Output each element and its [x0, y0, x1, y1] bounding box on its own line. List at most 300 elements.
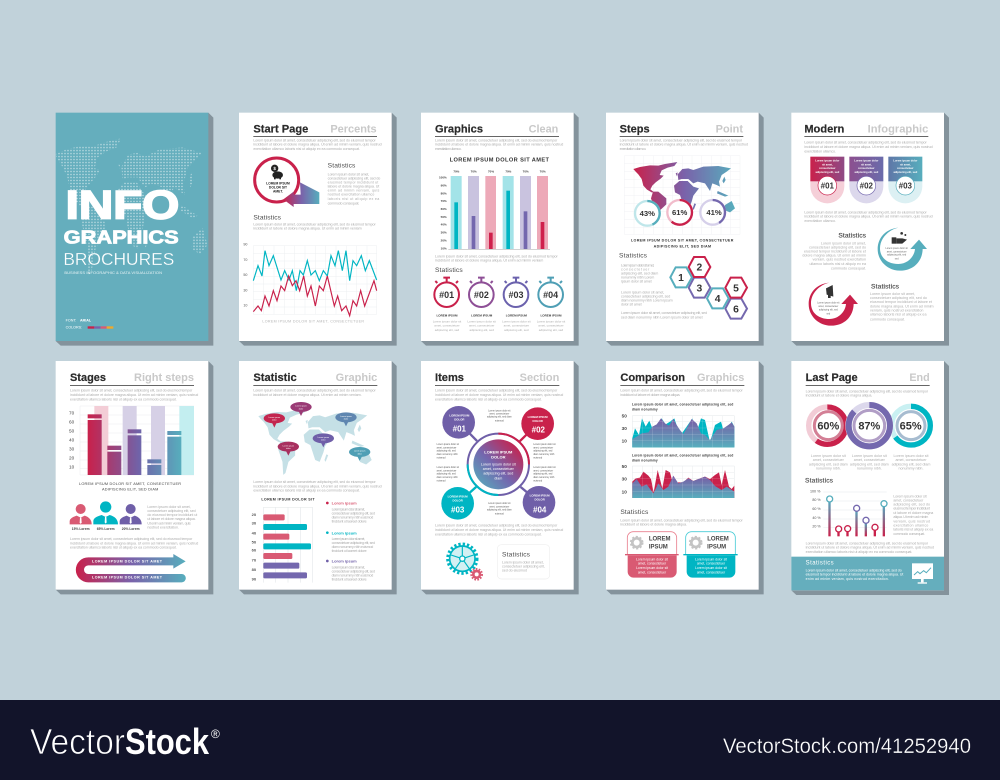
donut 60%: 60%: [817, 421, 840, 433]
donut captions: adipiscing elit, sed diam: [809, 462, 848, 466]
area chart 1: 10: [622, 439, 627, 444]
item captions: Lorem ipsum dolor sit: [533, 466, 556, 469]
card: crimson: IPSUM: [649, 544, 668, 550]
numbered hexagons: 6: [733, 304, 739, 315]
lower text: incididunt ut labore et dolore magna aliqua. Ut enim ad minim veniam, quis nostrud: [435, 528, 563, 532]
area chart 1: 50: [622, 414, 627, 419]
lollipop chart: 20 %: [812, 525, 821, 529]
statistics text: Lorem ipsum dolor sit amet, consectetuer adipiscing elit, sed do eiusmod tempor: [620, 518, 743, 522]
intro text: incididunt ut labore et dolore magna aliqua. Ut enim ad minim veniam, quis nostrud: [435, 143, 563, 147]
badge 02: Lorem ipsum dolor: [854, 159, 878, 163]
lower text: exercitation ullamco laboris nisi ut aliquip ex ea commodo consequat.: [70, 546, 177, 550]
area chart 2: 10: [622, 489, 627, 494]
people text: do eiusmod tempor incididunt ut: [147, 513, 197, 517]
panel: Items: [421, 361, 579, 594]
item captions: adipiscing elit, sed: [533, 473, 553, 476]
heading: [435, 123, 559, 137]
item 02: #02: [532, 426, 546, 435]
item captions: euismod: [437, 457, 446, 459]
people percentages: 65% Lorem: [97, 527, 115, 531]
item captions: adipiscing elit, sed: [533, 450, 553, 453]
intro text: [806, 389, 929, 398]
area chart 2: diam nonummy: [632, 458, 658, 462]
donut 65%: 65%: [900, 421, 922, 433]
middle text: exercitation ullamco.: [804, 219, 836, 223]
heading: Items: [435, 372, 464, 384]
intro text: Lorem ipsum dolor sit amet, consectetuer adipiscing elit, sed do eiusmod tempor: [253, 389, 376, 393]
crimson circular arrow: adipiscing elit, sed: [819, 308, 839, 311]
statistics text: [620, 509, 743, 527]
map caption: LOREM IPSUM DOLOR SIT AMET, CONSECTETUER: [631, 239, 734, 243]
donut captions: adipiscing elit, sed diam: [892, 462, 930, 466]
stopwatch captions: amet, consectetuer: [434, 324, 460, 328]
item 03: [441, 487, 474, 520]
lollipop chart: 80 %: [812, 498, 821, 502]
intro text: [620, 389, 743, 397]
line chart: 50: [243, 273, 247, 277]
area chart 1: [622, 403, 734, 447]
icon: hand with coins: [892, 232, 907, 244]
map text: [253, 480, 382, 493]
item captions: amet, consectetuer: [533, 469, 553, 472]
crimson circular arrow: [809, 283, 858, 326]
bar chart: 70%: [441, 199, 447, 203]
card: crimson: Lorem ipsum dolor sit: [636, 566, 668, 570]
lollipop chart: 40 %: [812, 516, 821, 520]
stopwatch 04: [538, 278, 563, 307]
world map with bubbles: Lorem ipsum: [283, 444, 294, 447]
chart title: LOREM IPSUM DOLOR SIT AMET: [450, 158, 550, 164]
donut captions: amet, consectetuer: [854, 458, 886, 462]
statistics left-aligned text: dolore magna aliqua. Ut enim ad minim: [870, 304, 934, 308]
people text: [147, 505, 197, 530]
brand logo text: Stock: [125, 721, 210, 762]
card: crimson: amet, consectetuer: [638, 571, 667, 575]
bar chart: 40: [69, 438, 75, 443]
world map with bubbles: dolor: [272, 419, 277, 422]
intro text: incididunt ut labore et dolore magna aliqua. Ut enim ad minim veniam, quis nostrud: [804, 145, 933, 149]
bar chart: 10%: [441, 246, 447, 250]
statistics text: adipiscing elit, sed diam: [621, 271, 658, 275]
panel: brochure cover: [55, 113, 213, 346]
heading: Percents: [330, 123, 377, 135]
people text: nostrud exercitation.: [147, 526, 179, 530]
legend: tincidunt ut laoreet dolore: [332, 520, 367, 524]
statistics right-aligned text: Lorem ipsum dolor sit amet,: [821, 241, 866, 245]
intro text: [620, 139, 748, 151]
badge 03: adipiscing elit, sed: [893, 170, 918, 174]
icon: gear: [690, 537, 701, 548]
legend: Lorem ipsum dolor sit amet,: [332, 508, 365, 512]
statistics left-aligned text: eiusmod tempor incididunt ut labore et: [870, 300, 932, 304]
legend: consectetuer adipiscing elit, sed: [332, 512, 375, 516]
legend: [326, 501, 375, 582]
statistics left-aligned text: ullamco laboris nisi ut aliquip ex ea: [870, 313, 927, 317]
area chart 2: Lorem ipsum dolor sit amet, consectetuer adipiscing elit, sed: [632, 453, 733, 457]
item 04: [523, 486, 555, 519]
hub and spoke diagram: adipiscing elit, sed: [483, 471, 513, 475]
bar chart: 50: [69, 429, 75, 434]
item captions: amet, consectetuer: [489, 505, 509, 508]
card: teal: [683, 532, 738, 578]
intro text: exercitation ullamco.: [804, 149, 836, 153]
chart caption: ADIPISCING ELIT, SED DIAM: [102, 488, 158, 492]
lower text: [435, 524, 563, 536]
heading: [253, 123, 377, 137]
statistics text: [328, 163, 380, 205]
intro text: [435, 389, 563, 402]
stopwatch captions: amet, consectetuer: [538, 324, 564, 328]
heading: Graphic: [336, 372, 377, 384]
statistics text: Statistics: [328, 163, 356, 170]
item 03: LOREM IPSUM: [448, 495, 468, 499]
middle text: Lorem ipsum dolor sit amet, consectetuer adipiscing elit, sed do eiusmod tempor: [804, 210, 927, 214]
brand logo text: [30, 721, 220, 762]
intro text: exercitation ullamco laboris nisi ut aliquip ex ea commodo consequat.: [253, 147, 360, 151]
donut captions: nonummy nibh.: [898, 467, 923, 471]
intro text: Lorem ipsum dolor sit amet, consectetuer adipiscing elit, sed do eiusmod tempor: [620, 389, 743, 393]
statistics heading and text: incididunt ut labore et dolore magna aliqua. Ut enim ad minim veniam: [253, 227, 362, 231]
legend: Lorem ipsum: [332, 559, 357, 564]
statistics text: Lorem ipsum dolor sit amet,: [621, 290, 664, 294]
statistics left-aligned text: veniam, quis nostrud exercitation: [870, 308, 923, 312]
donut captions: nonummy nibh.: [816, 467, 841, 471]
stopwatch captions: amet, consectetuer: [469, 324, 494, 328]
bar chart: 50%: [441, 215, 447, 219]
world map with bubbles: [258, 402, 372, 475]
item captions: euismod: [533, 457, 543, 459]
people percentages: 15% Lorem: [72, 527, 90, 531]
bar chart: 70%: [505, 170, 512, 174]
world map with bubbles: dolor: [344, 418, 349, 421]
world map with bubbles: Lorem ipsum: [340, 415, 352, 418]
legend: diam nonummy nibh euismod: [332, 573, 373, 577]
lower text: exercitation ullamco laboris nisi ut aliquip ex ea commodo consequat.: [806, 550, 912, 554]
map caption: [631, 239, 734, 248]
brand logo text: Vector: [30, 721, 125, 762]
statistics text: Lorem ipsum dolor sit amet, consectetuer adipiscing elit, sed: [621, 311, 707, 315]
statistics text: Statistics: [619, 253, 648, 260]
card: crimson: [625, 532, 679, 578]
item captions: Lorem ipsum dolor sit: [437, 466, 459, 469]
chart side text: exercitation ullamco: [893, 523, 928, 527]
teal circular arrow: adipiscing elit, sed: [887, 254, 907, 257]
card: crimson: Lorem ipsum dolor sit: [636, 557, 668, 561]
icon: presentation board: [912, 563, 933, 584]
item captions: amet, consectetuer: [437, 446, 457, 449]
badge 02: [849, 157, 883, 203]
heading: Last Page: [806, 372, 858, 384]
statistics text: Lorem ipsum dolor sit amet,: [328, 173, 369, 177]
statistics left-aligned text: consectetuer adipiscing elit, sed do: [870, 296, 927, 300]
item captions: euismod: [495, 514, 504, 516]
people percentages: 20% Lorem: [122, 527, 140, 531]
statistics right-aligned text: [802, 232, 867, 271]
chart caption: LOREM IPSUM DOLOR SIT AMET, CONSECTETUER: [79, 482, 181, 486]
badge 01: #01: [821, 182, 835, 191]
chart side text: veniam, quis nostrud: [893, 519, 930, 523]
stopwatch captions: Lorem ipsum dolor sit: [433, 320, 461, 324]
bar chart: 70%: [523, 170, 529, 174]
bar chart: 60%: [441, 207, 447, 211]
ring 43%: 43%: [640, 209, 655, 218]
line chart: 10: [243, 304, 247, 308]
bar chart: 20%: [441, 239, 447, 243]
card: crimson: LOREM: [649, 537, 670, 543]
stopwatch 04: #04: [543, 290, 558, 300]
font and colors key: ARIAL: [80, 319, 92, 323]
brand logo text: ®: [211, 727, 220, 741]
statistics text: consectetuer: [621, 267, 650, 271]
intro text: incididunt ut labore et dolore magna aliqua. Ut enim ad minim veniam, quis nostrud: [620, 143, 748, 147]
image id text: VectorStock.com/41252940: [723, 735, 971, 758]
hub and spoke diagram: diam: [494, 476, 502, 480]
icon: gears: [448, 544, 482, 580]
world map with bubbles: Lorem ipsum: [295, 405, 307, 408]
circle callout with arrow: [255, 158, 319, 207]
statistics text: consectetuer adipiscing elit, sed: [621, 294, 670, 298]
bar chart: 70%: [540, 170, 546, 174]
legend: consectetuer adipiscing elit, sed: [332, 541, 375, 545]
donut captions: Lorem ipsum dolor sit: [811, 454, 846, 458]
people text: Ut enim ad minim veniam, quis: [147, 521, 191, 525]
statistics right-aligned text: veniam, quis nostrud exercitation: [813, 258, 866, 262]
footer band: eiusmod tempor incididunt ut labore et dolore magna aliqua. Ut: [806, 573, 903, 577]
icon: piggy bank: $: [273, 166, 276, 171]
statistics right-aligned text: eiusmod tempor incididunt ut labore et: [804, 249, 866, 253]
heading: Statistic: [253, 372, 297, 384]
intro text: incididunt ut labore et dolore magna aliqua. Ut enim ad minim veniam.: [253, 393, 362, 397]
donut captions: nonummy nibh.: [857, 467, 882, 471]
stopwatch captions: LOREM IPSUM: [506, 314, 527, 318]
stopwatch captions: LOREM IPSUM: [540, 314, 562, 318]
line chart: 90: [243, 242, 247, 246]
statistics heading and text: [253, 215, 376, 231]
world map with bubbles: Lorem ipsum: [269, 416, 280, 419]
stopwatch captions: Lorem ipsum dolor sit: [467, 320, 496, 324]
item captions: [437, 410, 556, 516]
lower text: incididunt ut labore et dolore magna aliqua. Ut enim ad minim veniam, quis nostrud: [70, 541, 198, 545]
numbered hexagons: 2: [696, 263, 702, 274]
heading: Right steps: [134, 372, 194, 384]
item captions: euismod: [533, 481, 543, 483]
item 02: [521, 407, 554, 440]
hub and spoke diagram: [441, 406, 555, 520]
statistics text: eiusmod tempor incididunt ut: [328, 181, 378, 185]
statistics right-aligned text: ullamco laboris nisi ut aliquip ex ea: [809, 262, 867, 266]
heading: [435, 372, 559, 386]
legend: tincidunt ut laoreet dolore: [332, 549, 367, 553]
heading: Infographic: [868, 123, 928, 135]
item 01: [442, 406, 475, 439]
cover title: INFO: [66, 184, 179, 228]
stopwatch captions: LOREM IPSUM: [471, 314, 493, 318]
intro text: exercitation ullamco.: [435, 147, 462, 151]
statistics box: Lorem ipsum dolor sit amet,: [502, 560, 544, 564]
badge 03: [888, 157, 922, 203]
heading: [804, 123, 928, 137]
statistics box: consectetuer adipiscing elit,: [502, 564, 545, 568]
teal circular arrow: amet, consectetuer: [887, 250, 907, 253]
hub and spoke diagram: Lorem ipsum dolor sit: [481, 463, 516, 467]
circle callout with arrow: DOLOR SIT: [269, 185, 287, 189]
statistics right-aligned text: Statistics: [838, 232, 867, 239]
horizontal bar chart: 70: [252, 558, 257, 563]
item captions: Lorem ipsum dolor sit: [488, 410, 511, 413]
item captions: Lorem ipsum dolor sit: [437, 443, 459, 446]
heading: Comparison: [620, 372, 685, 384]
statistics text: nonummy nibh Lorem: [621, 275, 654, 279]
hub and spoke diagram: LOREM IPSUM: [484, 450, 513, 455]
hub and spoke diagram: amet, consectetuer: [483, 467, 515, 471]
lower text: exercitation ullamco laboris nisi ut aliquip ex ea commodo consequat.: [435, 532, 542, 536]
donut 87%: 87%: [858, 421, 881, 433]
intro text: Lorem ipsum dolor sit amet, consectetuer adipiscing elit, sed do eiusmod tempor: [806, 389, 929, 393]
intro text: incididunt ut labore et dolore magna aliqua. Ut enim ad minim veniam, quis nostrud: [435, 393, 563, 397]
horizontal bar chart: 60: [252, 548, 257, 553]
line chart: 70: [243, 258, 247, 262]
donut captions: adipiscing elit, sed diam: [850, 462, 889, 466]
legend: consectetuer adipiscing elit, sed: [332, 569, 375, 573]
intro text: exercitation ullamco laboris nisi ut aliquip ex ea commodo consequat.: [70, 398, 177, 402]
footer band: enim ad minim veniam, quis nostrud exercitation.: [806, 577, 889, 581]
legend: Lorem ipsum dolor sit amet,: [332, 565, 365, 569]
stopwatch captions: adipiscing elit, sed: [469, 328, 494, 332]
people percentages: [70, 501, 142, 531]
heading: Steps: [620, 123, 650, 135]
stopwatch captions: LOREM IPSUM: [436, 314, 458, 318]
people text: ut labore et dolore magna aliqua.: [147, 517, 196, 521]
item captions: diam nonummy nibh: [437, 454, 458, 456]
lollipop chart: 100 %: [810, 489, 821, 493]
intro text: [253, 389, 376, 397]
item captions: Lorem ipsum dolor sit: [488, 502, 511, 505]
lower text: Lorem ipsum dolor sit amet, consectetuer adipiscing elit, sed do eiusmod tempor: [70, 537, 193, 541]
statistics text: laboris nisi ut aliquip ex ea: [328, 197, 380, 201]
item captions: amet, consectetuer: [437, 469, 457, 472]
horizontal bar chart: 40: [252, 530, 257, 535]
icon: megaphone: [826, 285, 833, 298]
people text: consectetuer adipiscing elit, sed: [147, 509, 196, 513]
stopwatch captions: Lorem ipsum dolor sit: [537, 320, 565, 324]
badge 01: Lorem ipsum dolor: [815, 159, 839, 163]
lollipop chart: 60 %: [812, 507, 821, 511]
badge 03: sit amet,: [900, 162, 911, 166]
panel: Stages: [56, 361, 213, 594]
world map with bubbles: Lorem ipsum: [318, 436, 329, 439]
text below chart: incididunt ut labore et dolore magna aliqua. Ut enim ad minim veniam: [435, 258, 543, 262]
horizontal bar chart: 90: [252, 576, 257, 581]
area chart 2: [622, 453, 734, 498]
card: teal: Lorem ipsum dolor sit: [695, 566, 727, 570]
chart caption: [79, 482, 181, 492]
statistics box: sed do eiusmod: [502, 569, 527, 573]
intro text: [804, 141, 933, 153]
donut captions: Lorem ipsum dolor sit: [852, 454, 887, 458]
badge 02: #02: [860, 182, 874, 191]
intro text: exercitation ullamco.: [620, 147, 646, 151]
intro text: Lorem ipsum dolor sit amet, consectetuer adipiscing elit, sed do eiusmod tempor: [435, 139, 558, 143]
item 01: LOREM IPSUM: [449, 414, 470, 418]
intro text: incididunt ut labore et dolore magna aliqua.: [806, 394, 872, 398]
statistics text: ipsum dolor sit amet: [621, 280, 652, 284]
stopwatch 01: #01: [439, 290, 454, 300]
panel: Start Page: [239, 113, 397, 346]
bar chart: 70%: [488, 170, 494, 174]
legend: Lorem ipsum: [332, 530, 357, 535]
horizontal bar chart: 80: [252, 567, 257, 572]
chart side text: eiusmod tempor incididunt: [893, 507, 930, 511]
horizontal bar chart: 20: [252, 512, 257, 517]
U-turn arrow: [76, 554, 186, 582]
lower text: Lorem ipsum dolor sit amet, consectetuer adipiscing elit, sed do eiusmod tempor: [435, 524, 558, 528]
item 03: DOLOR: [453, 499, 463, 503]
lower text: incididunt ut labore et dolore magna aliqua. Ut enim ad minim veniam, quis nostrud: [806, 546, 934, 550]
stopwatch captions: amet, consectetuer: [504, 324, 529, 328]
legend: Lorem ipsum dolor sit amet,: [332, 537, 365, 541]
badge 03: consectetuer: [897, 166, 914, 170]
item captions: diam nonummy nibh: [437, 477, 458, 479]
badge 02: adipiscing elit, sed: [854, 170, 879, 174]
item captions: diam nonummy nibh: [533, 477, 555, 479]
statistics left-aligned text: [870, 284, 934, 321]
bar chart: 70%: [471, 170, 477, 174]
chart side text: aliqua. Ut enim ad minim: [893, 515, 928, 519]
item captions: amet, consectetuer: [533, 446, 553, 449]
stopwatch 03: #03: [508, 290, 523, 300]
heading: Point: [716, 123, 743, 135]
numbered hexagons: [670, 257, 747, 319]
ring 61%: 61%: [672, 208, 688, 217]
statistics box: [497, 545, 550, 579]
horizontal bar chart: LOREM IPSUM DOLOR SIT: [261, 498, 315, 502]
intro text: incididunt ut labore et dolore magna aliqua. Ut enim ad minim veniam, quis nostrud: [253, 143, 382, 147]
icon: gear: [631, 537, 642, 548]
cover title: BROCHURES: [63, 249, 174, 269]
stopwatch 01: [434, 278, 459, 307]
world map with bubbles: dolor: [357, 452, 362, 455]
numbered hexagons: 1: [678, 273, 684, 284]
bar chart: 30%: [441, 231, 447, 235]
donut captions: [809, 454, 930, 471]
bar chart: 20: [69, 456, 75, 461]
statistics right-aligned text: commodo consequat.: [831, 267, 866, 271]
teal circular arrow: sed: [895, 259, 899, 261]
cover title: [63, 184, 179, 275]
area chart 1: 30: [622, 426, 627, 431]
teal circular arrow: Lorem ipsum dolor sit: [886, 247, 908, 250]
item captions: diam nonummy nibh: [533, 454, 555, 456]
chart side text: adipiscing elit, sed do: [893, 503, 930, 507]
crimson circular arrow: amet, consectetuer: [818, 305, 838, 308]
stopwatch 02: [469, 278, 494, 307]
area chart 2: 50: [622, 464, 627, 469]
item captions: adipiscing elit, sed: [437, 450, 456, 453]
statistics text: diam nonummy nibh Lorem ipsum: [621, 298, 673, 302]
statistics text: nostrud exercitation ullamco: [328, 193, 374, 197]
item captions: adipiscing elit, sed: [437, 473, 456, 476]
item 04: #04: [533, 505, 547, 514]
badge 01: adipiscing elit, sed: [815, 170, 840, 174]
stopwatch 03: [504, 278, 528, 307]
chart side text: ut labore et dolore magna: [893, 511, 934, 515]
lower text: [70, 537, 198, 550]
card: teal: amet, consectetuer: [697, 571, 726, 575]
heading: Graphics: [435, 123, 483, 135]
statistics text: labore et dolore magna aliqua. Ut: [328, 185, 379, 189]
lollipop chart: [810, 489, 887, 536]
teal circular arrow: [878, 228, 927, 271]
